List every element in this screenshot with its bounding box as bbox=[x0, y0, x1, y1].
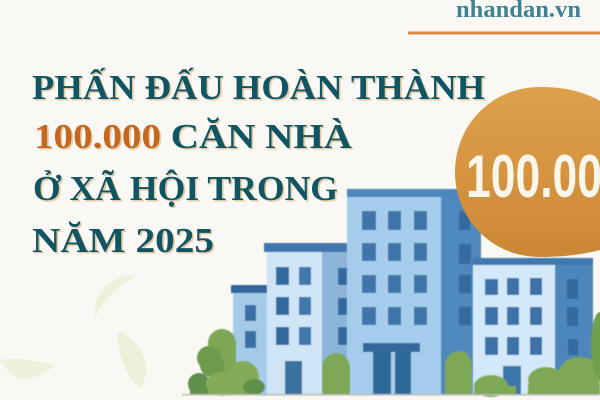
title bbox=[32, 67, 487, 262]
building: center tower bbox=[347, 189, 481, 394]
title shadow: 100.000 CĂN NHÀ bbox=[36, 118, 354, 158]
title line 2: 100.000 CĂN NHÀ bbox=[34, 116, 353, 156]
building: right bbox=[473, 258, 593, 394]
building: left tall bbox=[264, 243, 348, 394]
title shadow: Ở XÃ HỘI TRONG bbox=[35, 170, 340, 210]
title line 3: Ở XÃ HỘI TRONG bbox=[33, 168, 338, 208]
decorative leaves bbox=[0, 275, 146, 388]
badge: 100.000 circle bbox=[455, 87, 600, 257]
orange header rule bbox=[408, 32, 600, 34]
title shadow: PHẤN ĐẤU HOÀN THÀNH bbox=[34, 69, 487, 109]
building: far-left small bbox=[231, 285, 269, 394]
title line 4: NĂM 2025 bbox=[32, 220, 214, 260]
ground line bbox=[182, 394, 600, 396]
title shadow: NĂM 2025 bbox=[34, 222, 216, 262]
illustration: buildings bbox=[182, 189, 600, 397]
title shadow bbox=[34, 69, 487, 262]
trees bbox=[188, 312, 600, 397]
title line 1: PHẤN ĐẤU HOÀN THÀNH bbox=[32, 67, 485, 107]
